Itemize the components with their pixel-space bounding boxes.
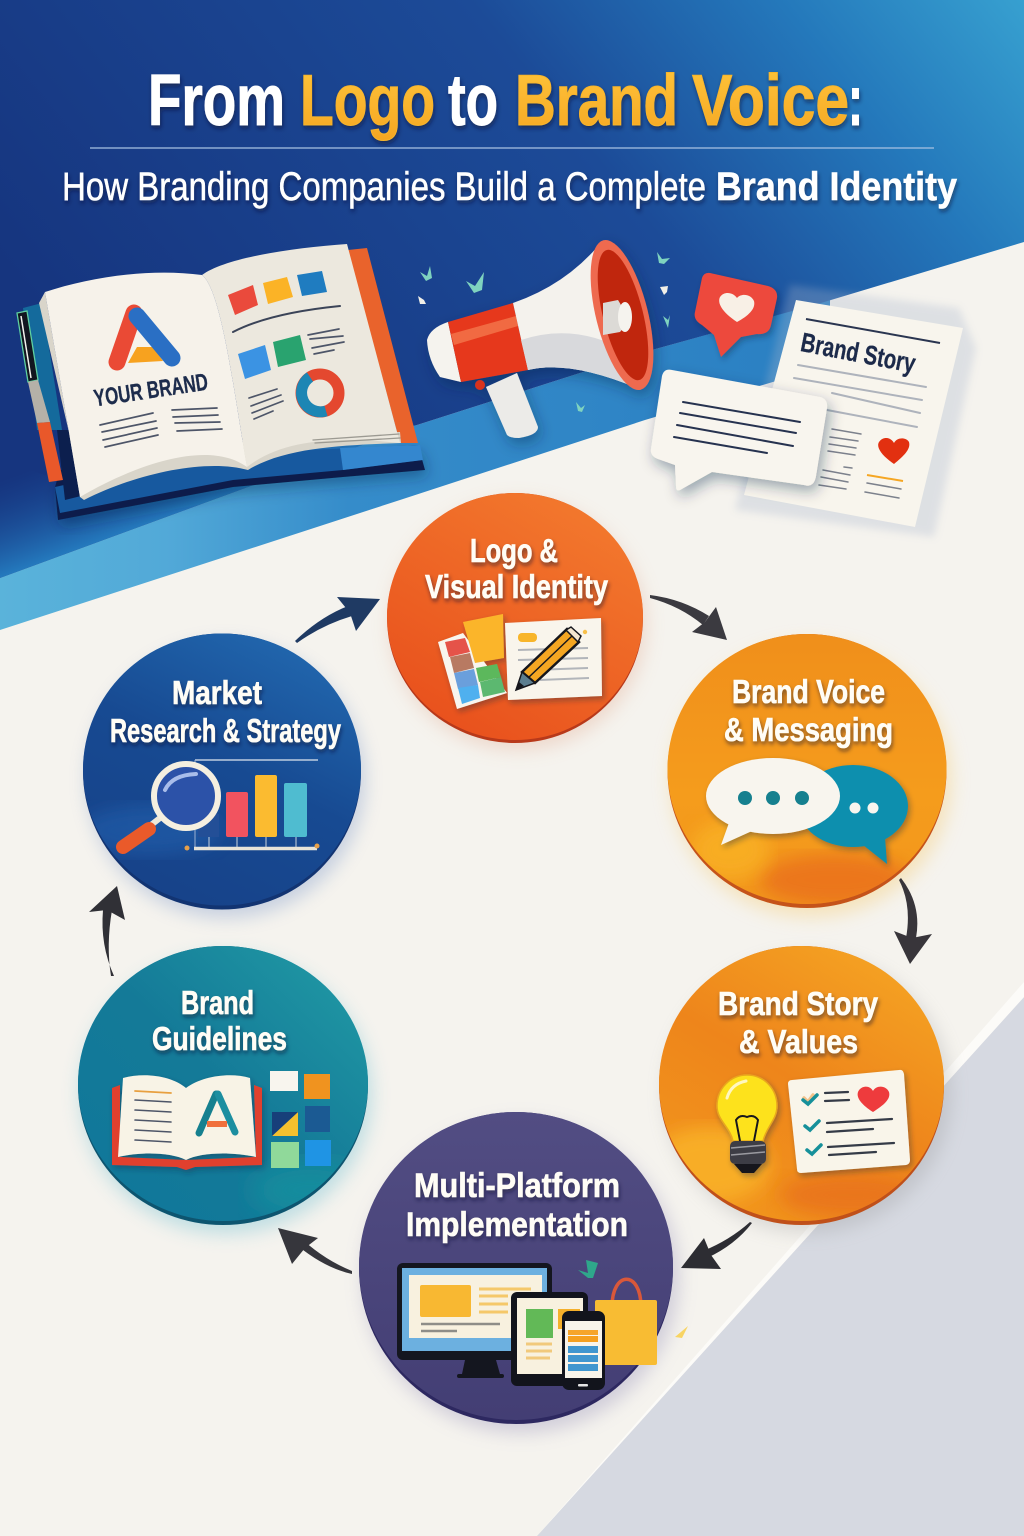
illustration: megaphone: [427, 234, 666, 438]
icon: light bulb: [717, 1075, 777, 1173]
arrow: voice to story: [894, 878, 932, 964]
illustration: chat bubble: [651, 370, 827, 490]
arrow: logo to voice: [650, 595, 727, 640]
circle: market research: [80, 634, 365, 918]
title: Brand: [515, 61, 678, 141]
label: Brand Story: [718, 985, 879, 1022]
subtitle: How Branding Companies Build a Complete: [62, 165, 706, 209]
doc heading: Brand Story: [798, 327, 918, 379]
title: Logo: [300, 61, 435, 141]
circle: logo and visual identity: [387, 493, 646, 750]
label: Brand: [181, 984, 254, 1021]
label: [718, 985, 879, 1060]
label: [724, 673, 893, 748]
book shadow and cover: [55, 445, 425, 520]
illustration: brand story document: [735, 285, 976, 537]
label: [110, 674, 341, 749]
label: Logo &: [470, 532, 558, 569]
label: Research & Strategy: [110, 712, 341, 749]
icon: colour blocks: [270, 1071, 331, 1168]
subtitle: Brand Identity: [716, 165, 958, 209]
title: :: [848, 61, 863, 141]
icon: values checklist: [788, 1070, 910, 1173]
label: & Messaging: [724, 711, 893, 748]
label: Guidelines: [152, 1020, 287, 1057]
label: Visual Identity: [425, 568, 609, 605]
label: Market: [172, 674, 262, 711]
icon: devices: [397, 1260, 657, 1390]
book label: YOUR BRAND: [92, 369, 210, 412]
circle: multi-platform implementation: [359, 1112, 679, 1433]
label: [406, 1167, 628, 1244]
title: [148, 61, 863, 141]
circle: brand story and values: [650, 946, 951, 1233]
label: [152, 984, 287, 1057]
icon: magnifier and bars: [123, 760, 320, 850]
label: & Values: [739, 1023, 858, 1060]
icon: guideline book: [112, 1075, 262, 1170]
illustration: brand book: [17, 244, 425, 520]
illustration: heart bubble: [695, 273, 777, 357]
logo mark: [117, 313, 172, 363]
arrow: guidelines to market: [89, 886, 125, 976]
circle: brand guidelines: [78, 946, 372, 1234]
title: From: [148, 61, 285, 141]
pages: [39, 292, 401, 500]
label: Implementation: [406, 1206, 628, 1244]
circle: brand voice: [668, 634, 951, 917]
label: [425, 532, 609, 605]
label: Brand Voice: [732, 673, 885, 710]
sparkles: [418, 252, 670, 412]
label: Multi-Platform: [414, 1167, 620, 1205]
accent spark: [675, 1326, 688, 1338]
arrow: market to logo: [295, 597, 380, 643]
icon: speech bubbles: [706, 758, 908, 864]
title: to: [448, 61, 498, 141]
arrow: story to multi-platform: [681, 1222, 752, 1269]
title: Voice: [692, 61, 849, 141]
arrow: multi-platform to guidelines: [278, 1228, 352, 1274]
icon: swatches and pencil: [438, 614, 602, 709]
